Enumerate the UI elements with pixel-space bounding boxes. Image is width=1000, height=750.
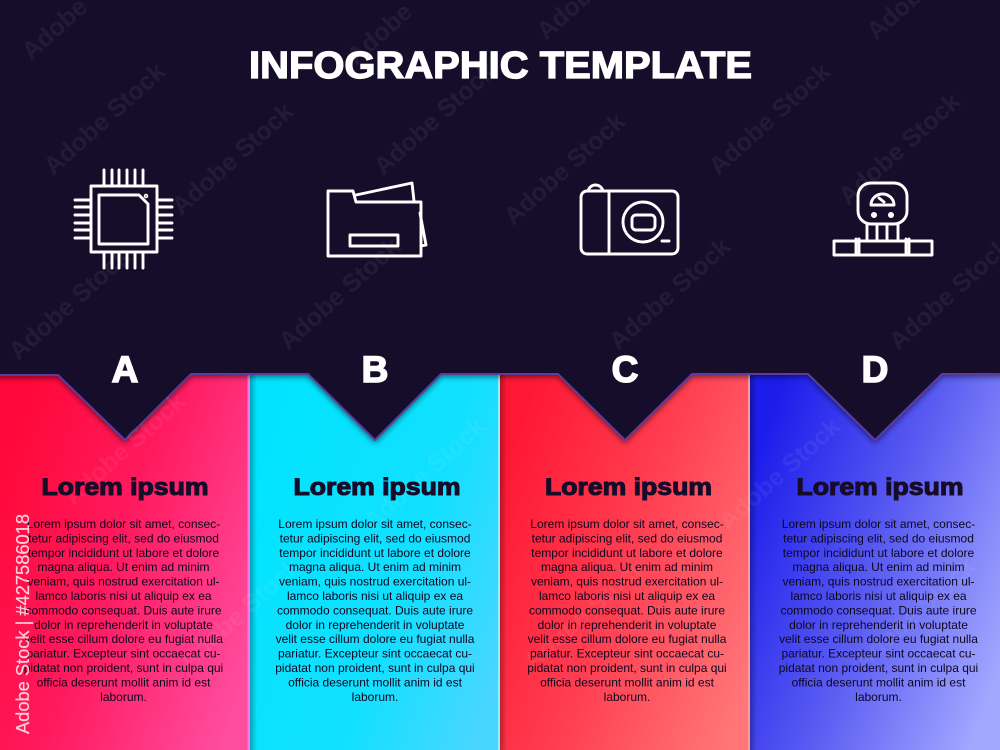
icon: photo camera [581, 185, 678, 254]
text block: panel B: officia deserunt mollit anim id est [288, 675, 463, 689]
text block: panel A: lamco laboris nisi ut aliquip ex ea [35, 589, 212, 603]
watermark pattern: Adobe Stock [174, 552, 306, 676]
text block: panel C: officia deserunt mollit anim id est [540, 675, 715, 689]
heading: panel A: Lorem ipsum [42, 474, 208, 501]
side label: Adobe Stock | #427586018 [13, 514, 33, 734]
text block: panel A: tetur adipiscing elit, sed do eiusmod [28, 531, 219, 545]
text block: panel D: tempor incididunt ut labore et dolore [783, 546, 975, 560]
text block: panel A: dolor in reprehenderit in voluptate [34, 618, 213, 632]
text block: panel B: veniam, quis nostrud exercitation ul- [279, 575, 471, 589]
text block: panel D: commodo consequat. Duis aute irure [780, 603, 977, 617]
panel: B background [250, 372, 500, 750]
text block: panel C: pariatur. Excepteur sint occaecat cu- [530, 647, 724, 661]
watermark pattern: Adobe Stock [714, 412, 846, 536]
watermark pattern: Adobe Stock [4, 242, 136, 366]
text block: panel A: pidatat non proident, sunt in culpa qui [24, 661, 223, 675]
text block: panel D: velit esse cillum dolore eu fugiat nulla [779, 632, 978, 646]
watermark pattern: Adobe Stock [849, 552, 981, 676]
watermark pattern: Adobe Stock [59, 387, 191, 511]
panel: C background [500, 372, 750, 750]
letter C: C [612, 349, 638, 390]
icon: folder with documents [328, 183, 426, 256]
text block: panel C: lamco laboris nisi ut aliquip ex ea [539, 589, 715, 603]
text block: panel A: officia deserunt mollit anim id est [37, 675, 211, 689]
text block: panel B: lamco laboris nisi ut aliquip ex ea [287, 589, 463, 603]
text block: panel C: tempor incididunt ut labore et dolore [531, 546, 723, 560]
text block: panel C: velit esse cillum dolore eu fugiat nulla [528, 632, 727, 646]
text block: panel D [779, 517, 978, 704]
text block: panel D: pariatur. Excepteur sint occaecat cu- [781, 647, 976, 661]
text block: panel D: veniam, quis nostrud exercitation ul- [782, 575, 975, 589]
text block: panel B: dolor in reprehenderit in voluptate [286, 618, 465, 632]
text block: panel C: magna aliqua. Ut enim ad minim [541, 560, 713, 574]
text block: panel D: Lorem ipsum dolor sit amet, consec- [782, 517, 975, 531]
text block: panel A: pariatur. Excepteur sint occaecat cu- [26, 647, 221, 661]
watermark pattern: Adobe Stock [39, 57, 171, 181]
icon: processor chip [75, 170, 172, 268]
text block: panel D: officia deserunt mollit anim id est [792, 675, 966, 689]
text block: panel C: dolor in reprehenderit in voluptate [538, 618, 717, 632]
text block: panel A [24, 517, 223, 704]
text block: panel B: Lorem ipsum dolor sit amet, consec- [278, 517, 472, 531]
text block: panel B: pariatur. Excepteur sint occaecat cu- [278, 647, 472, 661]
text block: panel A: veniam, quis nostrud exercitation ul- [27, 575, 220, 589]
dark header with V-shaped notches [0, 0, 1000, 440]
letter B: B [362, 349, 388, 390]
text block: panel B: laborum. [352, 690, 398, 704]
text block: panel A: commodo consequat. Duis aute irure [25, 603, 222, 617]
icon: water meter on pipe [834, 183, 932, 255]
text block: panel D: pidatat non proident, sunt in culpa qui [779, 661, 978, 675]
text block: panel B: velit esse cillum dolore eu fugiat nulla [276, 632, 475, 646]
text block: panel D: laborum. [855, 690, 902, 704]
text block: panel C: veniam, quis nostrud exercitation ul- [531, 575, 723, 589]
text block: panel A: Lorem ipsum dolor sit amet, consec- [27, 517, 220, 531]
heading: panel C: Lorem ipsum [545, 474, 712, 501]
watermark pattern: Adobe Stock [274, 232, 406, 356]
watermark pattern: Adobe Stock [359, 412, 491, 536]
text block: panel B: commodo consequat. Duis aute irure [277, 603, 473, 617]
text block: panel B [275, 517, 475, 704]
text block: panel A: velit esse cillum dolore eu fugiat nulla [24, 632, 223, 646]
panel: D background [750, 372, 1000, 750]
watermark pattern: Adobe Stock [499, 107, 631, 231]
text block: panel C: tetur adipiscing elit, sed do eiusmod [532, 531, 722, 545]
watermark pattern: Adobe Stock [604, 232, 736, 356]
text block: panel B: pidatat non proident, sunt in culpa qui [275, 661, 475, 675]
text block: panel C: pidatat non proident, sunt in culpa qui [527, 661, 727, 675]
watermark pattern: Adobe Stock [834, 87, 966, 211]
text block: panel B: magna aliqua. Ut enim ad minim [289, 560, 461, 574]
text block: panel C: Lorem ipsum dolor sit amet, consec- [530, 517, 724, 531]
watermark pattern: Adobe Stock [167, 97, 299, 221]
heading: panel D: Lorem ipsum [796, 474, 964, 501]
text block: panel D: dolor in reprehenderit in voluptate [789, 618, 968, 632]
watermark pattern: Adobe Stock [704, 57, 836, 181]
text block: panel C [527, 517, 727, 704]
text block: panel B: tetur adipiscing elit, sed do eiusmod [280, 531, 470, 545]
text block: panel A: magna aliqua. Ut enim ad minim [37, 560, 210, 574]
text block: panel C: laborum. [604, 690, 650, 704]
letter D: D [862, 349, 888, 390]
panel edge highlights [248, 372, 757, 750]
watermark pattern: Adobe Stock [519, 552, 651, 676]
letter A: A [112, 349, 138, 390]
text block: panel C: commodo consequat. Duis aute irure [529, 603, 725, 617]
text block: panel A: tempor incididunt ut labore et dolore [28, 546, 220, 560]
text block: panel D: magna aliqua. Ut enim ad minim [792, 560, 965, 574]
heading: panel B: Lorem ipsum [294, 474, 460, 501]
text block: panel D: tetur adipiscing elit, sed do eiusmod [783, 531, 974, 545]
text block: panel B: tempor incididunt ut labore et dolore [279, 546, 471, 560]
title: INFOGRAPHIC TEMPLATE [249, 45, 752, 87]
text block: panel D: lamco laboris nisi ut aliquip ex ea [790, 589, 967, 603]
text block: panel A: laborum. [100, 690, 147, 704]
watermark pattern: Adobe Stock [369, 57, 501, 181]
panel: A background [0, 372, 250, 750]
